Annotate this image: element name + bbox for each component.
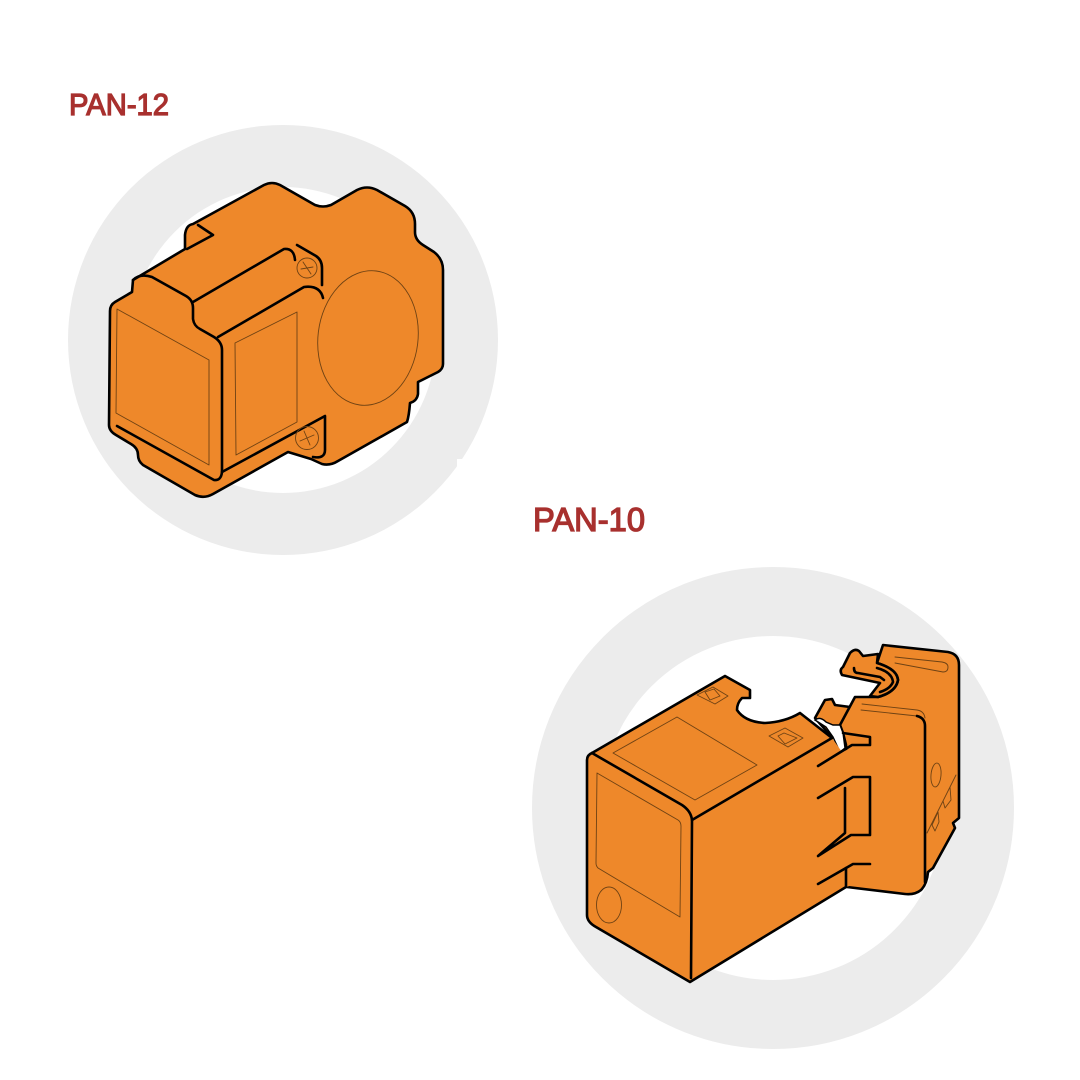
side diagonals	[927, 775, 956, 833]
device body outline	[109, 183, 443, 497]
side ellipse	[930, 763, 942, 787]
barrel lower edge	[222, 416, 325, 472]
body top front edge	[592, 753, 692, 978]
upper slot	[818, 733, 870, 766]
left panel	[116, 309, 209, 465]
upper clip tab and hook	[841, 650, 898, 697]
flange grooves	[895, 657, 948, 672]
barrel upper edges	[193, 249, 295, 302]
ring: PAN-10 background	[566, 602, 980, 1014]
top notch	[187, 225, 213, 249]
lower clip tab	[815, 699, 850, 735]
top square left	[697, 687, 728, 704]
hook inner lines	[854, 668, 893, 692]
middle slot	[818, 777, 870, 856]
barrel outline	[117, 276, 222, 480]
right panel	[235, 312, 297, 455]
lower slot	[818, 864, 870, 884]
ring: PAN-12 background	[68, 125, 498, 555]
icon: PAN-10 device	[587, 645, 959, 982]
screw bottom	[296, 426, 318, 450]
heading: PAN-10: PAN-10	[533, 501, 645, 538]
body top right edge	[692, 738, 832, 820]
back piece outline	[840, 645, 959, 894]
white gap	[815, 718, 845, 752]
vertical edge	[917, 716, 925, 882]
screw top	[297, 258, 317, 278]
lens circle	[310, 265, 426, 411]
front panel	[596, 773, 681, 917]
heading: PAN-12: PAN-12	[69, 87, 169, 122]
front circle	[596, 887, 622, 923]
top panel	[613, 717, 757, 800]
top square right	[769, 728, 803, 747]
main body fill	[587, 676, 856, 982]
icon: PAN-12 device	[109, 183, 443, 497]
main body outline	[587, 676, 846, 982]
ring notch	[457, 459, 466, 469]
